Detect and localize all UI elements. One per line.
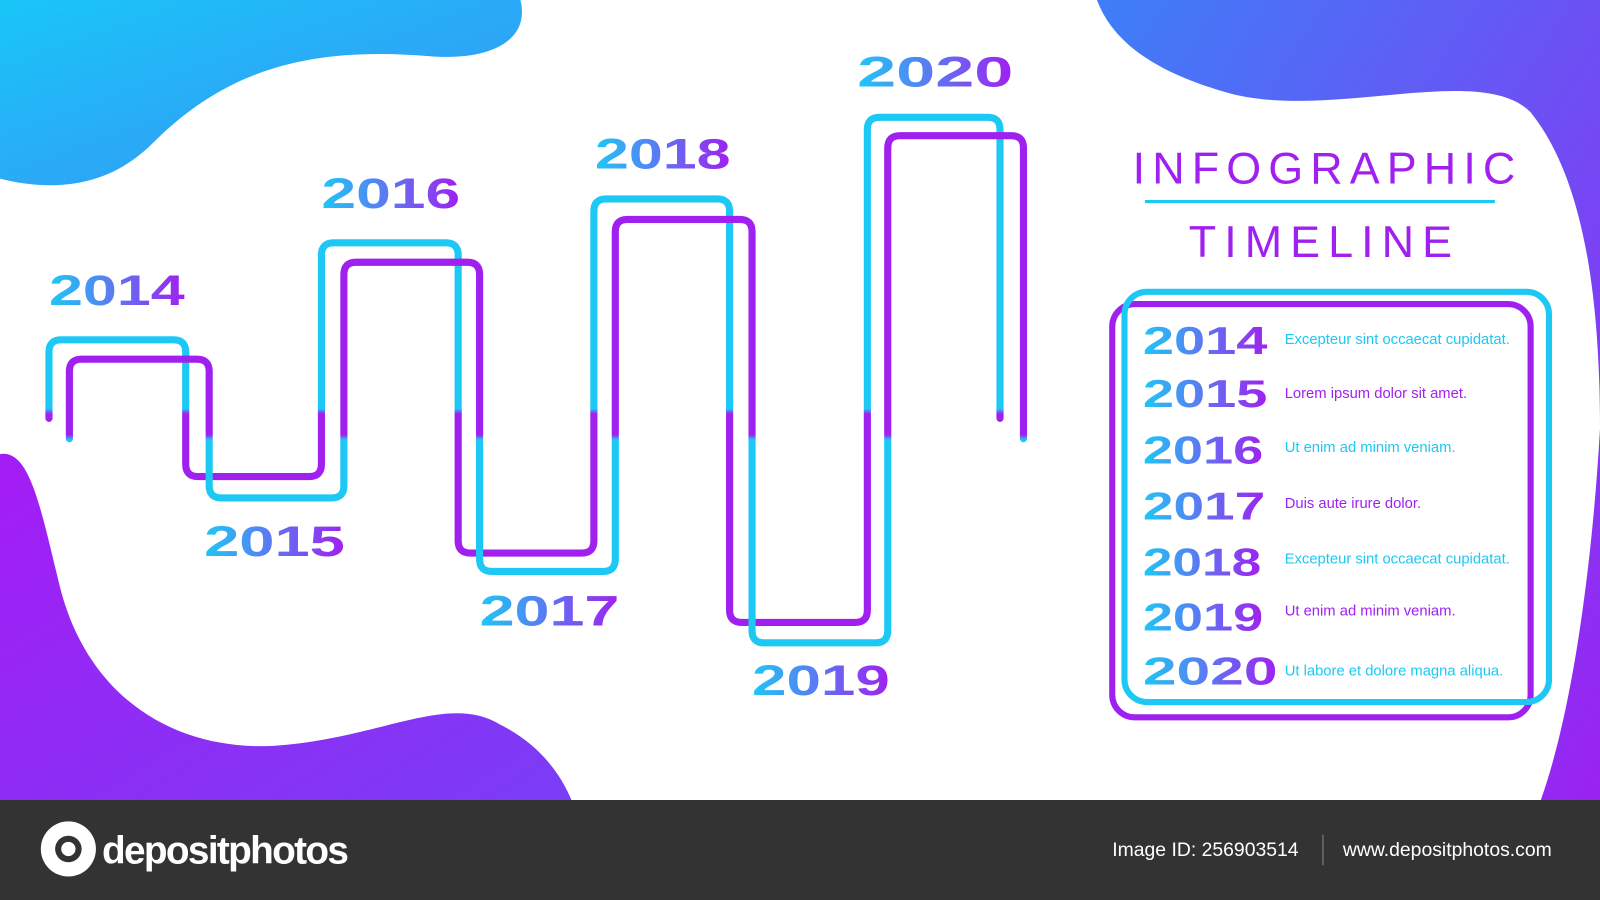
list entries: Ut labore et dolore magna aliqua. — [1285, 664, 1503, 680]
list entries: Lorem ipsum dolor sit amet. — [1285, 386, 1467, 402]
year labels: 2020 — [857, 49, 1013, 97]
year labels: 2016 — [321, 170, 460, 218]
list entries: 2017 — [1143, 485, 1265, 528]
year labels: 2015 — [204, 518, 345, 566]
list entries: Excepteur sint occaecat cupidatat. — [1285, 332, 1510, 348]
blob: top-left — [0, 0, 522, 185]
blob: bottom-left — [0, 454, 571, 800]
timeline path — [49, 117, 1023, 643]
list entries: 2018 — [1143, 542, 1261, 585]
footer bar: Image ID: 256903514 — [1112, 839, 1299, 861]
footer bar: www.depositphotos.com — [1342, 839, 1552, 861]
list entries: Duis aute irure dolor. — [1285, 496, 1421, 512]
title: INFOGRAPHIC — [1133, 143, 1515, 194]
footer bar — [0, 800, 1600, 900]
year labels — [49, 49, 1013, 705]
year labels: 2018 — [595, 130, 731, 178]
footer bar: depositphotos — [102, 829, 349, 872]
list entries: 2020 — [1143, 651, 1278, 694]
list entries: 2014 — [1143, 320, 1268, 363]
list entries: Excepteur sint occaecat cupidatat. — [1285, 551, 1510, 567]
blob: top-right — [1097, 0, 1600, 800]
title — [1133, 143, 1515, 267]
list entries — [1143, 320, 1510, 694]
list entries: 2019 — [1143, 597, 1263, 640]
list box — [1112, 292, 1549, 717]
year labels: 2014 — [49, 267, 185, 315]
list entries: 2016 — [1143, 429, 1263, 472]
year labels: 2019 — [752, 657, 890, 705]
list entries: 2015 — [1143, 373, 1267, 416]
list entries: Ut enim ad minim veniam. — [1285, 440, 1456, 456]
title: TIMELINE — [1189, 216, 1452, 267]
list entries: Ut enim ad minim veniam. — [1285, 603, 1456, 619]
year labels: 2017 — [480, 588, 619, 636]
